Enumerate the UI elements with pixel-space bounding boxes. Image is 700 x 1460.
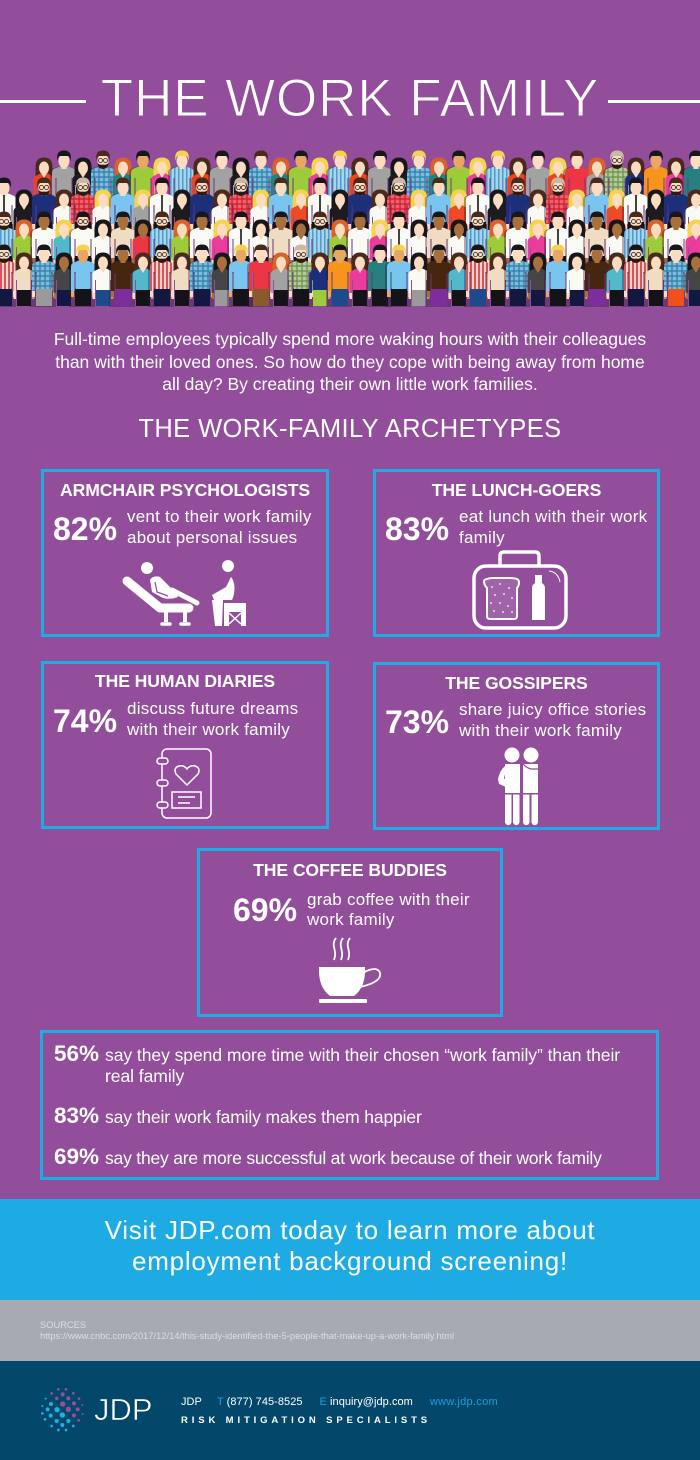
call to action text: [104, 1215, 595, 1276]
sources band: [0, 1300, 700, 1361]
description: [459, 507, 648, 546]
stat: 74%: [53, 703, 117, 739]
text 56%: real family: [105, 1066, 184, 1086]
icon: lunchbox: [472, 550, 568, 630]
title rule left: [0, 100, 86, 103]
crowd row 3: [0, 212, 700, 274]
call to action text: employment background screening!: [132, 1246, 568, 1276]
description: share juicy office stories: [459, 700, 646, 719]
contact line: JDP T (877) 745-8525 E inquiry@jdp.com www.jdp.com: [181, 1396, 498, 1408]
panel: lunch-goers: [373, 469, 660, 637]
heading: THE HUMAN DIARIES: [95, 671, 275, 691]
title rule right: [608, 100, 700, 103]
description: eat lunch with their work: [459, 507, 647, 526]
intro paragraph: [54, 329, 646, 394]
title: THE WORK FAMILY: [101, 69, 599, 128]
intro paragraph: than with their loved ones. So how do they cope with being away from home: [55, 352, 645, 372]
sources text: SOURCES: [40, 1320, 86, 1330]
icon: diary: [156, 748, 212, 819]
heading: THE GOSSIPERS: [445, 673, 588, 693]
description: vent to their work family: [127, 507, 312, 526]
text 83%: say their work family makes them happier: [105, 1107, 422, 1127]
text 56%: say they spend more time with their chosen “work family” than their: [105, 1045, 620, 1065]
description: family: [459, 528, 505, 546]
description: [307, 890, 470, 929]
heading: THE LUNCH-GOERS: [432, 480, 601, 500]
stat: 69%: [233, 892, 297, 928]
sources text: https://www.cnbc.com/2017/12/14/this-study-identified-the-5-people-that-make-up-a-work-family.html: [40, 1331, 454, 1341]
text 56%: [105, 1045, 620, 1086]
description: [127, 507, 312, 546]
panel: armchair psychologists: [41, 469, 329, 637]
intro paragraph: all day? By creating their own little work families.: [162, 374, 538, 394]
description: with their work family: [127, 720, 290, 738]
description: [127, 699, 298, 738]
footer band: [0, 1361, 700, 1460]
icon: two people: [498, 748, 538, 826]
section heading: THE WORK-FAMILY ARCHETYPES: [138, 415, 562, 443]
description: about personal issues: [127, 528, 297, 546]
call to action text: Visit JDP.com today to learn more about: [105, 1215, 595, 1245]
stat 69%: 69%: [54, 1144, 99, 1168]
description: with their work family: [459, 720, 622, 740]
crowd row 4: [0, 244, 700, 307]
heading: ARMCHAIR PSYCHOLOGISTS: [60, 480, 310, 500]
logo mark: [41, 1388, 84, 1432]
intro paragraph: Full-time employees typically spend more waking hours with their colleagues: [54, 329, 646, 349]
stat: 83%: [385, 511, 449, 547]
stat 83%: 83%: [54, 1103, 99, 1128]
crowd row 1: [34, 150, 700, 213]
crowd row 2: [0, 178, 700, 243]
panel: gossipers: [373, 662, 660, 830]
panel: coffee buddies: [197, 848, 503, 1017]
panel: human diaries: [41, 661, 329, 829]
logo wordmark: JDP: [94, 1392, 153, 1427]
stat: 73%: [385, 704, 449, 740]
sources text: [40, 1320, 454, 1341]
description: [459, 700, 646, 740]
icon: coffee cup: [318, 938, 381, 1003]
icon: therapist and patient: [122, 560, 246, 626]
description: discuss future dreams: [127, 699, 298, 718]
tagline: RISK MITIGATION SPECIALISTS: [181, 1415, 431, 1426]
text 69%: say they are more successful at work because of their work family: [105, 1148, 602, 1168]
heading: THE COFFEE BUDDIES: [253, 860, 447, 880]
stat 56%: 56%: [54, 1041, 99, 1066]
panel: summary statistics: [40, 1030, 659, 1180]
description: grab coffee with their: [307, 890, 470, 908]
crowd illustration: [0, 150, 700, 307]
stat: 82%: [53, 511, 117, 547]
description: work family: [307, 910, 395, 929]
call to action band: [0, 1199, 700, 1300]
